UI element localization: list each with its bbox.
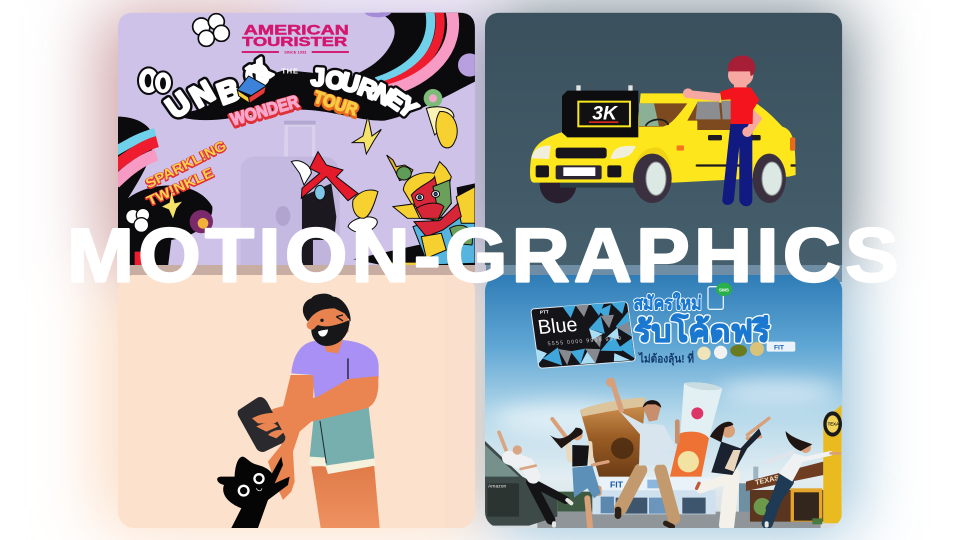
headline: Unbox the Journey: THE — [281, 67, 299, 76]
wonder tour: WONDER — [228, 91, 301, 129]
headline: Unbox the Journey: UNBOX — [160, 53, 278, 125]
windows — [639, 103, 687, 127]
small banana and cloud — [348, 190, 378, 232]
shirt — [291, 340, 379, 398]
man — [683, 56, 762, 206]
logo: TOURISTER — [242, 35, 347, 49]
sparkling twinkle: TW!NKLE — [144, 165, 216, 209]
wonder tour: WONDER — [228, 92, 301, 131]
coffee cup — [580, 398, 646, 477]
headline: Unbox the Journey: UNBOX — [160, 53, 278, 125]
cloud bottom left — [126, 208, 150, 232]
open red lid — [301, 152, 358, 201]
thai headline — [633, 292, 770, 349]
far arm — [268, 375, 315, 500]
Texas restaurant: TEXAS — [828, 422, 842, 427]
banana — [426, 107, 457, 148]
headline: Unbox the Journey — [160, 53, 423, 125]
shorts — [309, 407, 375, 474]
logo: SINCE 1933 — [284, 50, 307, 55]
blue card: 5555 0000 9999 9999 — [547, 336, 622, 347]
sparkling twinkle: SPARKL!NG — [143, 137, 229, 191]
near arm and hand — [272, 376, 378, 432]
trees and skyline — [557, 467, 758, 513]
Texas restaurant — [746, 405, 842, 524]
orange drink — [670, 382, 722, 477]
eyes — [138, 67, 172, 94]
partner logos — [637, 342, 795, 366]
logo: AMERICAN — [244, 22, 349, 37]
left black blob and rainbow — [118, 117, 212, 267]
battery: 3K — [592, 103, 619, 124]
sparkling twinkle: TW!NKLE — [144, 164, 216, 209]
giant yaksha character — [387, 155, 475, 265]
wonder tour: TOUR — [311, 88, 361, 121]
background glow — [100, 0, 850, 530]
sparkling twinkle: SPARKL!NG — [143, 138, 229, 192]
star — [352, 116, 381, 154]
black swoosh behind title — [171, 10, 475, 121]
sms icon: SMS — [719, 287, 729, 292]
thai headline: รับโค้ดฟรี — [634, 313, 770, 349]
small star — [162, 192, 182, 218]
person 2: woman in black top — [550, 419, 608, 527]
thai headline: สมัครใหม่ — [633, 292, 702, 314]
popcorn cloud — [193, 14, 229, 46]
fingers — [252, 413, 285, 438]
clouds — [494, 380, 837, 435]
thai headline: สมัครใหม่ — [633, 292, 702, 314]
greenhouse building — [485, 441, 557, 526]
rainbow stripes top right — [376, 10, 453, 90]
white glove — [291, 161, 311, 185]
panel: man with phone and cat — [118, 275, 475, 528]
wonder tour — [228, 86, 361, 131]
panel: car and battery — [485, 13, 842, 266]
title: MOTION-GRAPHICS — [67, 214, 903, 298]
Texas restaurant: TEXAS — [754, 473, 780, 487]
car details — [531, 135, 796, 179]
partner logos: ไม่ต้องลุ้น! ที่ — [637, 350, 694, 366]
blue card — [531, 302, 636, 368]
FIT store — [592, 478, 716, 514]
car body — [530, 93, 796, 183]
headline: Unbox the Journey: JOURNEY — [310, 64, 423, 124]
thai headline: รับโค้ดฟรี — [634, 313, 770, 349]
wonder tour: TOUR — [311, 86, 361, 120]
floor stripes and black floor — [134, 244, 475, 265]
greenhouse building: Amazon — [488, 484, 507, 490]
suitcase — [241, 121, 340, 267]
box icon — [237, 76, 266, 103]
headline: Unbox the Journey: JOURNEY — [310, 64, 423, 124]
cat — [217, 457, 290, 528]
phone — [238, 397, 285, 452]
tyres — [540, 182, 634, 204]
wheels — [632, 147, 786, 203]
partner logos: FIT — [774, 345, 784, 352]
FIT store: FIT — [610, 479, 624, 489]
person 4: woman in navy blazer — [697, 418, 769, 525]
neck and head — [323, 339, 343, 353]
panel: American Tourister — [115, 7, 481, 267]
person 1: man far left — [499, 432, 571, 526]
ground — [537, 512, 821, 528]
blue card: Blue — [537, 314, 579, 339]
person 3: central man — [606, 378, 677, 527]
person 5: woman right — [767, 431, 840, 526]
battery — [562, 85, 638, 137]
logo — [242, 22, 349, 55]
top purple blob — [364, 12, 392, 18]
legs — [311, 463, 380, 528]
panel: PTT Blue Card — [485, 275, 842, 528]
blue card: PTT — [540, 309, 549, 315]
sms icon — [708, 283, 732, 309]
